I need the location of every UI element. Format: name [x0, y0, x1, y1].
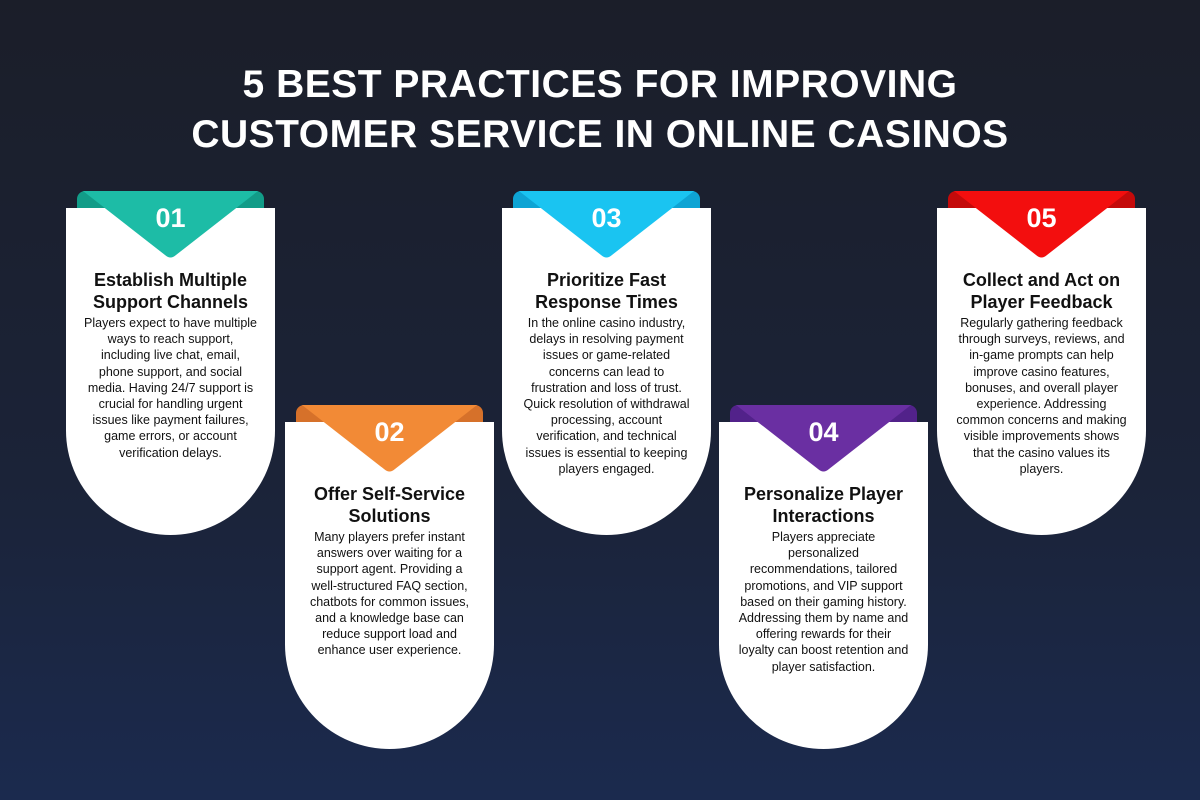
number 01: 01 [155, 203, 186, 233]
heading 05: Collect and Act on Player Feedback [963, 270, 1120, 312]
panel: card 03 [502, 191, 711, 535]
panel: card 01 [66, 191, 275, 535]
panel: card 04 [719, 405, 928, 749]
icon: chevron 01 [83, 191, 258, 258]
heading 01: Establish Multiple Support Channels [93, 270, 248, 312]
title: 5 BEST PRACTICES FOR IMPROVING [243, 63, 957, 106]
number 03: 03 [591, 203, 622, 233]
text 04: Players appreciate personalized recommendations, tailored promotions, and VIP support based on their gaming history. Addressing them by name and offering rewards for their loyalty can boost retention and player satisfaction. [739, 530, 908, 674]
number 05: 05 [1026, 203, 1057, 233]
heading 04: Personalize Player Interactions [744, 484, 903, 526]
title: CUSTOMER SERVICE IN ONLINE CASINOS [191, 113, 1009, 156]
number 02: 02 [374, 417, 405, 447]
panel: card 05 [937, 191, 1146, 535]
heading 03: Prioritize Fast Response Times [535, 270, 678, 312]
text 03: In the online casino industry, delays in resolving payment issues or game-related concerns can lead to frustration and loss of trust. Quick resolution of withdrawal processing, account verification, and technical issues is essential to keeping players engaged. [523, 316, 690, 476]
icon: chevron 05 [954, 191, 1129, 258]
icon: chevron 02 [302, 405, 477, 472]
icon: chevron 04 [736, 405, 911, 472]
text 05: Regularly gathering feedback through surveys, reviews, and in-game prompts can help improve casino features, bonuses, and overall player experience. Addressing common concerns and making visible improvements shows that the casino values its players. [956, 316, 1127, 476]
text 01: Players expect to have multiple ways to reach support, including live chat, email, phone support, and social media. Having 24/7 support is crucial for handling urgent issues like payment failures, game errors, or account verification delays. [84, 316, 257, 460]
heading 02: Offer Self-Service Solutions [314, 484, 465, 526]
number 04: 04 [808, 417, 839, 447]
panel: card 02 [285, 405, 494, 749]
text 02: Many players prefer instant answers over waiting for a support agent. Providing a well-structured FAQ section, chatbots for common issues, and a knowledge base can reduce support load and enhance user experience. [310, 530, 469, 657]
icon: chevron 03 [519, 191, 694, 258]
title [191, 63, 1009, 156]
